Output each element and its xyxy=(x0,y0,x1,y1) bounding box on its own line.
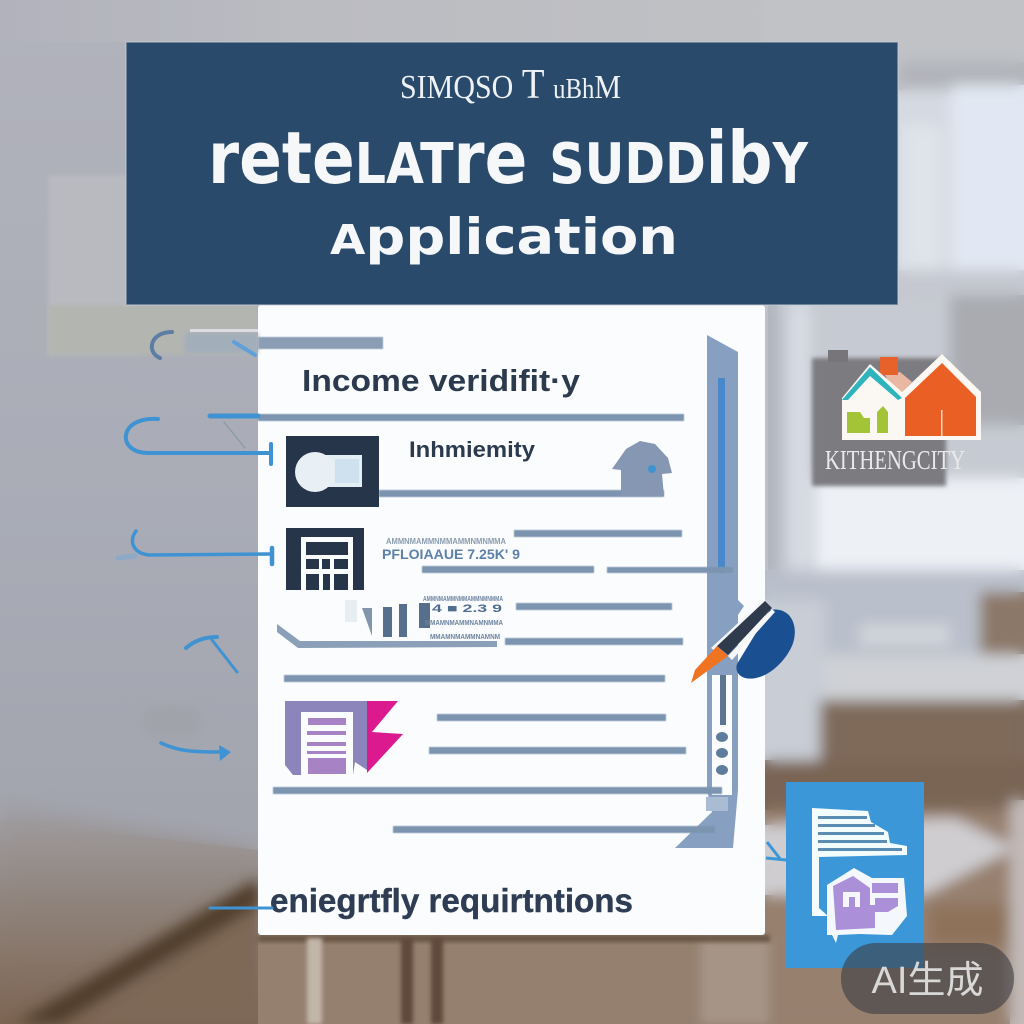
left annotation arrows xyxy=(118,329,272,908)
icon: purple document with magenta bolt xyxy=(285,701,403,776)
heading: income verification: Income veridifit·y xyxy=(302,363,581,398)
icon: pen xyxy=(691,600,795,683)
logo: house badge xyxy=(812,350,981,486)
bar chart: MMAMNMAMMNAMNM xyxy=(430,634,500,641)
main title: reteLATre SUDDibY xyxy=(208,116,809,200)
label: identity: Inhmiemity xyxy=(409,437,536,462)
form lines xyxy=(258,337,733,833)
label: eligibility requirements: eniegrtfly requirtntions xyxy=(270,882,633,919)
eyebrow text: SIMQSO T uBhM xyxy=(400,62,621,108)
wall frame xyxy=(48,175,258,355)
document sheet xyxy=(258,305,765,935)
bar chart: AMMNMAMMNMMAMMNMNMMA xyxy=(423,596,503,603)
arrow 2 xyxy=(126,416,271,464)
arrow 1 xyxy=(152,329,258,358)
small figures text xyxy=(382,537,520,562)
title banner xyxy=(126,42,898,305)
tray line xyxy=(277,624,497,648)
icon: grey house xyxy=(612,441,672,496)
bar chart: MMAMNMAMMNAMNMMA xyxy=(425,620,503,627)
arrow 3 xyxy=(118,531,272,564)
side binder bar xyxy=(675,335,744,848)
chat house xyxy=(827,868,907,943)
bar chart: 4 ■ 2.3 9 xyxy=(432,603,502,615)
window side xyxy=(765,0,1024,1024)
subtitle: Application xyxy=(330,208,678,266)
arrow 5 xyxy=(161,743,231,761)
icon: calculator xyxy=(286,528,364,590)
small blue mark beside card xyxy=(766,842,786,860)
arrow 4 xyxy=(186,637,237,672)
bar chart xyxy=(345,596,503,641)
arrow 6 xyxy=(210,906,272,910)
small figures text: PFLOIAAUE 7.25K' 9 xyxy=(382,546,520,562)
badge: AI generated: AI生成 xyxy=(872,960,983,1002)
logo text: KITHENGCITY xyxy=(825,445,965,475)
icon: id card xyxy=(286,436,379,507)
sofa and floor left xyxy=(0,805,770,1024)
small figures text: AMMNMAMMNMMAMMNMNMMA xyxy=(386,537,506,546)
card: blue document and house xyxy=(786,782,924,968)
badge: AI generated xyxy=(841,943,1014,1014)
